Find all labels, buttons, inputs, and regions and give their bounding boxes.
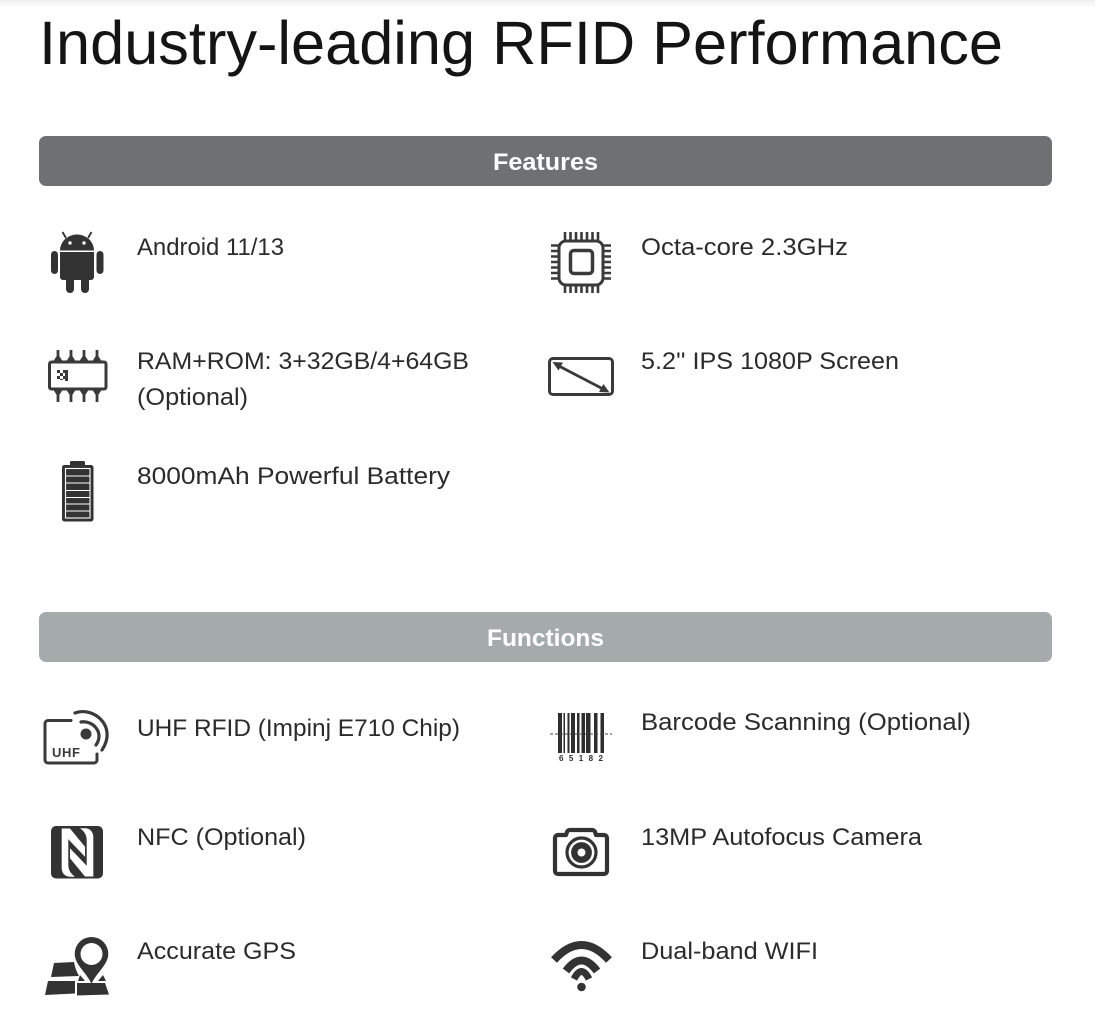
icon: barcode: 65182 (559, 754, 604, 763)
text: wifi: Dual-band WIFI (641, 938, 818, 965)
heading: functions (39, 612, 1052, 662)
text: barcode: Barcode Scanning (Optional) (641, 709, 971, 736)
icon: wifi (554, 945, 609, 991)
icon: barcode (550, 713, 612, 763)
icon: android (51, 232, 104, 293)
icon: ram chip (50, 350, 106, 402)
icon: gps map pin (45, 937, 109, 996)
icon: camera (555, 830, 607, 874)
text: android: Android 11/13 (137, 234, 284, 261)
heading: features: Features (493, 149, 598, 176)
icon: battery (62, 461, 94, 522)
icon: uhf rfid (45, 712, 107, 763)
text: camera: 13MP Autofocus Camera (641, 824, 923, 851)
panel: features (39, 136, 1052, 522)
text: screen: 5.2'' IPS 1080P Screen (641, 348, 899, 375)
icon: nfc (51, 826, 103, 878)
text: gps: Accurate GPS (137, 938, 296, 965)
icon: uhf rfid: UHF (52, 745, 80, 760)
panel: functions (39, 612, 1052, 996)
icon: screen (550, 358, 612, 394)
text: cpu: Octa-core 2.3GHz (641, 234, 848, 261)
text: battery: 8000mAh Powerful Battery (137, 463, 450, 490)
title: Industry-leading RFID Performance (39, 9, 1003, 77)
text: ram and rom (137, 348, 469, 411)
heading: features (39, 136, 1052, 186)
text: ram and rom: (Optional) (137, 384, 248, 411)
text: uhf rfid: UHF RFID (Impinj E710 Chip) (137, 715, 460, 742)
icon: cpu (551, 232, 611, 293)
heading: functions: Functions (487, 625, 604, 652)
text: nfc: NFC (Optional) (137, 824, 306, 851)
text: ram and rom: RAM+ROM: 3+32GB/4+64GB (137, 348, 469, 375)
